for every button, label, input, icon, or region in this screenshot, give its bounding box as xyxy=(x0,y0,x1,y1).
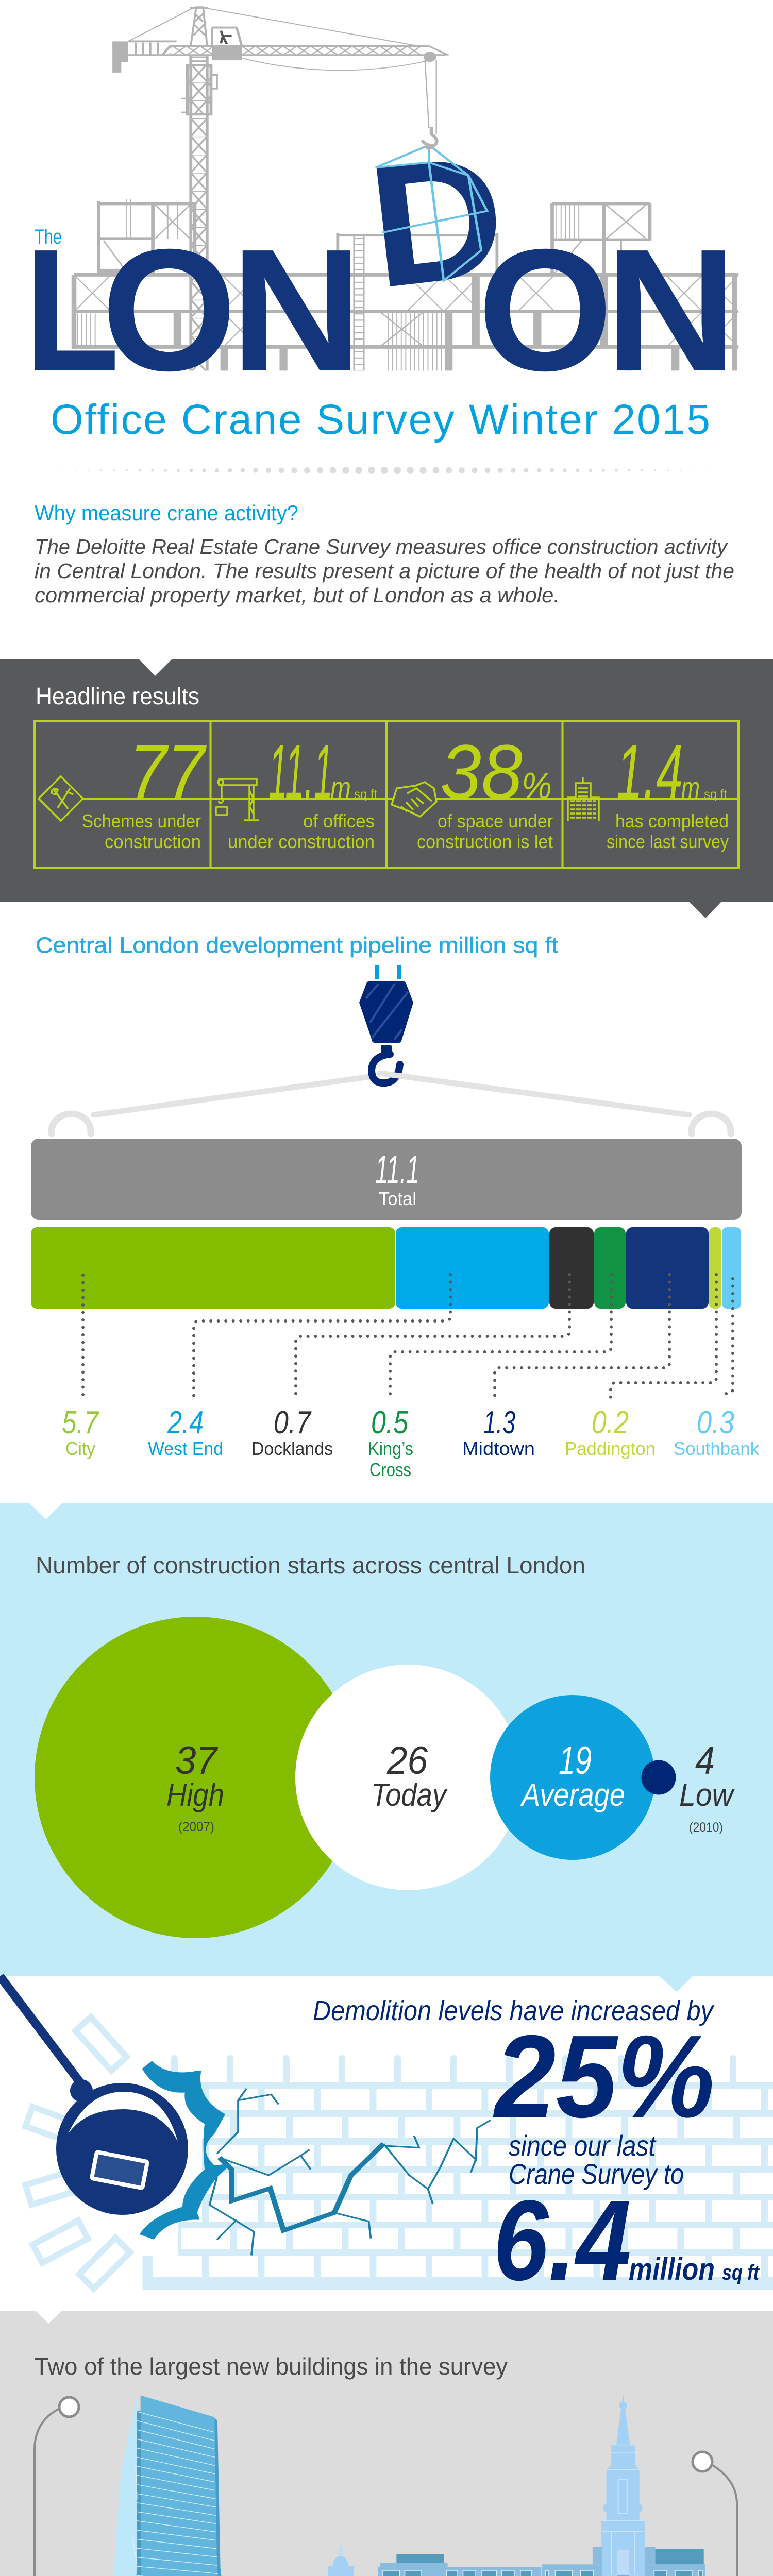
grey background with notches xyxy=(0,2311,773,2576)
panel: headline results xyxy=(0,659,773,918)
stat: 38% let: construction is let xyxy=(417,831,553,852)
title: LONDON wordmark: L xyxy=(24,213,120,407)
King's Cross: Cross xyxy=(369,1459,411,1480)
circle: High: (2007) xyxy=(178,1820,214,1834)
Paddington: 0.2 xyxy=(592,1405,629,1440)
chart: stacked bar by submarket xyxy=(31,1227,741,1309)
circle: Today: 26 xyxy=(386,1739,428,1783)
dotted divider xyxy=(49,467,719,474)
Midtown: Midtown xyxy=(462,1438,535,1459)
stat: 1.4m sq ft: sq ft xyxy=(704,787,727,802)
illustration: tower 100 Bishopsgate xyxy=(100,2395,241,2576)
leader line: right building xyxy=(693,2452,737,2576)
title: LONDON wordmark: O xyxy=(478,213,613,407)
illustration: Alphabeta building spire xyxy=(601,2394,645,2576)
heading: Headline results xyxy=(36,683,199,709)
callout: demolition levels: Crane Survey to xyxy=(509,2158,684,2190)
callout: demolition levels: sq ft xyxy=(722,2260,760,2284)
stat: 77 schemes: 77 xyxy=(129,728,207,815)
Docklands xyxy=(251,1405,333,1459)
intro paragraph xyxy=(35,535,734,607)
Paddington: Paddington xyxy=(565,1438,656,1459)
circle: Today: Today xyxy=(371,1777,448,1813)
chart: total bar: 11.1 xyxy=(375,1147,419,1192)
circle: High: 37 xyxy=(175,1739,219,1783)
results grid xyxy=(35,721,738,868)
illustration: wall cracks and impact xyxy=(140,2061,491,2256)
heading: Two of the largest new buildings in the survey xyxy=(35,2353,508,2380)
circle: Average xyxy=(490,1695,655,1860)
Paddington xyxy=(565,1405,656,1459)
leader line: left building xyxy=(35,2397,79,2576)
callout: demolition levels xyxy=(313,1995,760,2304)
title: LONDON wordmark: N xyxy=(605,213,737,407)
stat: 38% let: % xyxy=(522,766,552,807)
Southbank: 0.3 xyxy=(697,1405,734,1440)
illustration: crane and scaffolding behind the title xyxy=(74,7,738,370)
title: LONDON wordmark: O xyxy=(102,213,237,407)
title: suspended letter D with rigging: D xyxy=(360,117,514,325)
chart labels: submarket values xyxy=(62,1405,760,1480)
circle: High xyxy=(35,1617,356,1938)
illustration: Alphabeta building facade xyxy=(309,2545,706,2576)
stat: 77 schemes xyxy=(39,728,207,852)
circle: Today xyxy=(295,1665,521,1890)
tower crane xyxy=(112,7,449,370)
circle: Average: 19 xyxy=(559,1739,592,1783)
circle: Low: 4 xyxy=(695,1739,715,1783)
circle: Average: Average xyxy=(520,1777,625,1813)
circle: Low: Low xyxy=(679,1777,735,1813)
Docklands: Docklands xyxy=(251,1438,333,1459)
callout: demolition levels: Demolition levels have increased by xyxy=(313,1995,715,2026)
heading: Number of construction starts across central London xyxy=(36,1552,585,1579)
stat: 1.4m sq ft: has completed xyxy=(615,810,729,832)
chart: total bar: Total xyxy=(379,1188,416,1209)
stat: 11.1m sq ft xyxy=(216,728,377,852)
stat: 1.4m sq ft: 1.4 xyxy=(616,728,683,815)
intro paragraph: commercial property market, but of London as a whole. xyxy=(35,583,560,607)
circle: Low xyxy=(641,1739,735,1835)
intro heading: Why measure crane activity? xyxy=(35,501,298,525)
chart: total bar xyxy=(31,1139,742,1220)
hook xyxy=(381,1045,392,1054)
title: The: The xyxy=(35,226,62,248)
King's Cross: King’s xyxy=(368,1438,413,1459)
callout: demolition levels: million xyxy=(629,2252,715,2286)
City: 5.7 xyxy=(62,1405,99,1440)
stat: 11.1m sq ft: under construction xyxy=(228,831,375,852)
City xyxy=(62,1405,99,1459)
Southbank: Southbank xyxy=(674,1438,760,1459)
panel: construction starts xyxy=(0,1503,773,1992)
light blue background with notches xyxy=(0,1503,773,1992)
King's Cross xyxy=(368,1405,413,1480)
intro paragraph: in Central London. The results present a picture of the health of not just the xyxy=(35,559,734,583)
section heading: pipeline: Central London development pipeline million sq ft xyxy=(36,933,558,958)
illustration: flying bricks xyxy=(25,2017,130,2289)
Southbank xyxy=(674,1405,760,1459)
illustration: crane hook and slings xyxy=(52,965,731,1133)
callout: demolition levels: 6.4 xyxy=(493,2177,631,2304)
illustration: brick wall xyxy=(143,2055,773,2286)
stat: 1.4m sq ft: m xyxy=(681,771,700,805)
subtitle: Office Crane Survey Winter 2015 xyxy=(51,396,710,443)
slings xyxy=(52,1073,731,1133)
stat: 11.1m sq ft: m xyxy=(330,771,351,805)
intro paragraph: The Deloitte Real Estate Crane Survey measures office construction activity xyxy=(35,535,728,558)
callout: demolition levels: since our last xyxy=(509,2129,657,2162)
Docklands: 0.7 xyxy=(274,1405,312,1440)
stat: 11.1m sq ft: of offices xyxy=(303,810,375,832)
illustration: wrecking ball xyxy=(0,1976,188,2215)
dark panel background with notches xyxy=(0,659,773,918)
title: LONDON wordmark: N xyxy=(230,213,363,407)
stat: 11.1m sq ft: 11.1 xyxy=(268,728,333,815)
stat: 38% let: 38 xyxy=(440,728,523,815)
leader lines: dotted connectors xyxy=(83,1275,733,1399)
cables xyxy=(375,965,379,979)
pulley block xyxy=(359,981,413,1043)
stat: 77 schemes: Schemes under xyxy=(82,810,201,832)
circle: High: High xyxy=(166,1777,224,1813)
callout: demolition levels: 25% xyxy=(493,2011,715,2142)
stat: 77 schemes: construction xyxy=(105,831,201,852)
panel: largest new buildings xyxy=(0,2311,773,2576)
stat: 1.4m sq ft xyxy=(568,728,729,852)
Midtown: 1.3 xyxy=(483,1405,515,1440)
Midtown xyxy=(462,1405,535,1459)
stat: 1.4m sq ft: since last survey xyxy=(607,831,729,852)
West End xyxy=(148,1405,223,1459)
title: LONDON wordmark xyxy=(24,213,737,407)
stat: 11.1m sq ft: sq ft xyxy=(354,787,377,802)
stat: 38% let xyxy=(392,728,553,852)
circle: Low: (2010) xyxy=(689,1820,723,1835)
windows: upper dark xyxy=(383,2570,702,2576)
scaffolding structure xyxy=(74,199,738,370)
West End: 2.4 xyxy=(167,1405,204,1440)
West End: West End xyxy=(148,1438,223,1459)
City: City xyxy=(65,1438,95,1459)
King's Cross: 0.5 xyxy=(371,1405,408,1440)
stat: 38% let: of space under xyxy=(438,810,553,832)
